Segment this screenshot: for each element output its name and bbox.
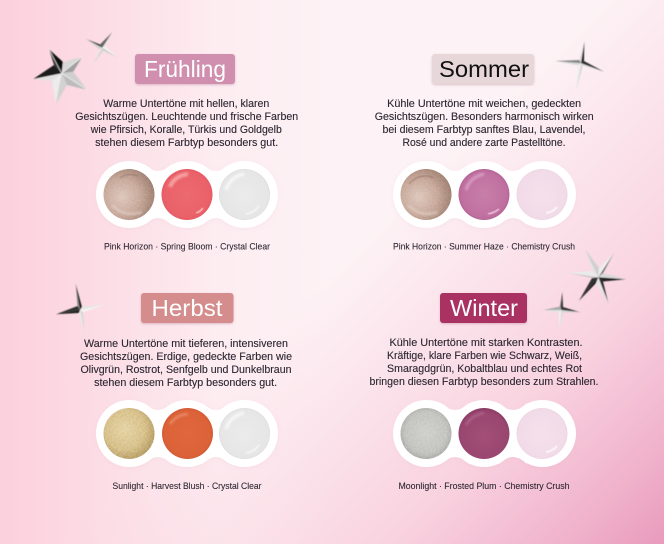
swatch tray: Frühling [96, 161, 278, 228]
caption: Herbst shades: Sunlight · Harvest Blush · Crystal Clear [112, 481, 262, 491]
heading badge: Winter: Winter [450, 295, 518, 321]
swatch: Chemistry Crush [516, 169, 568, 220]
caption: Winter shades: Moonlight · Frosted Plum · Chemistry Crush [398, 481, 570, 491]
swatch: Spring Bloom [162, 169, 212, 220]
swatch: Harvest Blush [162, 408, 213, 459]
caption: Sommer shades: Pink Horizon · Summer Haze · Chemistry Crush [393, 242, 575, 252]
text block: Sommer description: Kühle Untertöne mit weichen, gedeckten [387, 98, 581, 110]
text block: Sommer description: Rosé und andere zarte Pastelltöne. [402, 137, 566, 149]
icon: six-point silver star Winter [568, 249, 626, 303]
text block: Frühling description [75, 98, 298, 149]
text block: Sommer description [375, 98, 594, 149]
text block: Winter description: Kühle Untertöne mit starken Kontrasten. [390, 337, 582, 349]
text block: Frühling description: Warme Untertöne mit hellen, klaren [103, 98, 269, 110]
text block: Herbst description: Warme Untertöne mit tieferen, intensiveren [84, 338, 288, 350]
icon: silver sparkle Herbst [56, 284, 106, 335]
card: Sommer [375, 54, 594, 252]
icon: small silver star top left [86, 32, 118, 64]
text block: Winter description: Kräftige, klare Farben wie Schwarz, Weiß, [387, 350, 582, 362]
heading badge: Sommer: Sommer [439, 56, 529, 82]
text block: Herbst description: Gesichtszügen. Erdige, gedeckte Farben wie [80, 351, 292, 363]
text block: Winter description: Smaragdgrün, Kobaltblau und echtes Rot [387, 363, 582, 375]
card: Frühling [75, 54, 298, 252]
heading badge: Herbst [141, 293, 234, 323]
swatch: Crystal Clear [219, 169, 270, 220]
swatch tray: Sommer [393, 161, 576, 228]
swatch: Summer Haze [458, 169, 510, 220]
text block: Winter description [370, 337, 598, 388]
card: Winter [370, 293, 598, 491]
swatch: Crystal Clear [219, 408, 270, 459]
swatch: Chemistry Crush [516, 408, 568, 459]
heading badge: Winter [440, 293, 527, 323]
text block: Sommer description: Gesichtszügen. Besonders harmonisch wirken [375, 111, 594, 123]
swatch: Frosted Plum [458, 408, 510, 459]
icon: silver sparkle top right [555, 42, 604, 92]
text block: Winter description: bringen diesen Farbtyp besonders zum Strahlen. [370, 376, 598, 388]
caption: Frühling shades: Pink Horizon · Spring Bloom · Crystal Clear [104, 242, 270, 252]
swatch: Moonlight [400, 408, 452, 459]
text block: Herbst description: Olivgrün, Rostrot, Senfgelb und Dunkelbraun [80, 364, 292, 376]
icon: silver sparkle small Winter [543, 292, 580, 330]
swatch: Pink Horizon [400, 169, 452, 220]
swatch: Pink Horizon [104, 169, 154, 220]
swatch tray: Herbst [96, 400, 278, 467]
text block: Sommer description: bei diesem Farbtyp sanftes Blau, Lavendel, [382, 124, 586, 136]
swatch: Sunlight [104, 408, 154, 459]
text block: Frühling description: wie Pfirsich, Koralle, Türkis und Goldgelb [90, 124, 282, 136]
icon: large silver star top left [33, 49, 87, 104]
heading badge: Herbst: Herbst [152, 295, 223, 321]
swatch tray: Winter [393, 400, 576, 467]
heading badge: Frühling: Frühling [144, 56, 226, 82]
text block: Frühling description: Gesichtszügen. Leuchtende und frische Farben [75, 111, 298, 123]
text block: Herbst description [80, 338, 292, 389]
card: Herbst [80, 293, 292, 491]
text block: Frühling description: stehen diesem Farbtyp besonders gut. [95, 137, 278, 149]
text block: Herbst description: stehen diesem Farbtyp besonders gut. [94, 377, 277, 389]
